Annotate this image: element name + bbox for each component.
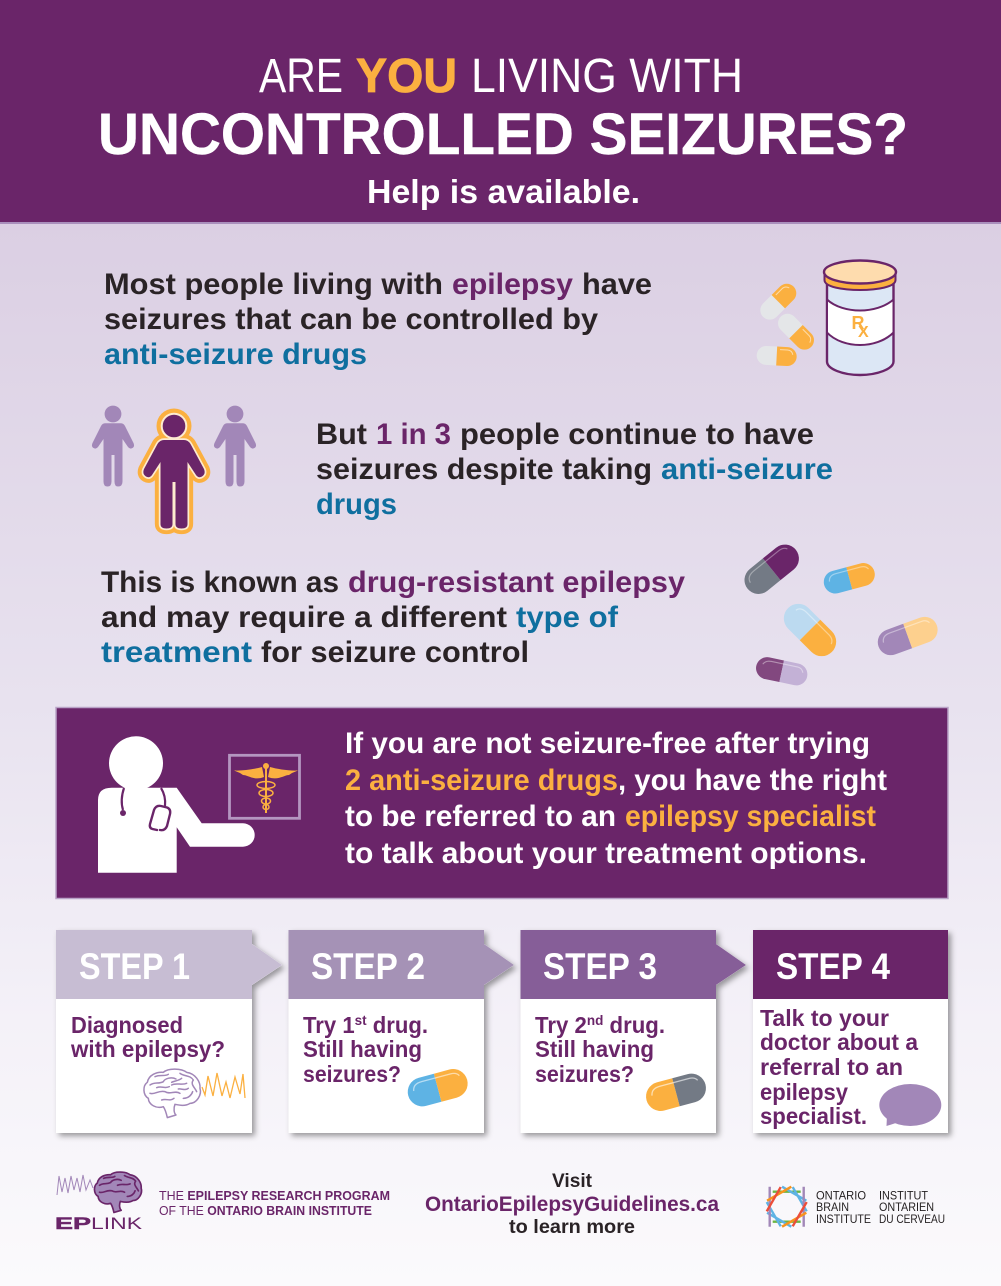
callout text: If you are not seizure-free after trying <box>345 727 870 760</box>
text block: 1 in 3: drugs <box>316 488 397 521</box>
step 1 text <box>70 1012 225 1062</box>
text block: drug-resistant epilepsy: and may require a different <box>101 601 507 634</box>
icon: blue and orange capsule <box>404 1066 471 1110</box>
subtitle: Help is available. <box>367 173 640 210</box>
text block: most people: epilepsy <box>452 268 573 301</box>
step 3 card <box>520 930 746 1133</box>
title line 1 <box>259 50 743 103</box>
logo: EpLink: EP <box>55 1214 91 1233</box>
logo: Ontario Brain Institute: ONTARIEN <box>879 1200 934 1214</box>
step 3 card: STEP 3 <box>543 946 657 987</box>
step 2 card: STEP 2 <box>311 946 425 987</box>
icon: speech bubble <box>879 1084 941 1126</box>
icon: pills and prescription bottle <box>756 260 896 375</box>
text block: most people: seizures that can be controlled by <box>104 303 598 336</box>
step 2 text: seizures? <box>303 1061 401 1087</box>
text: epilepsy research program tagline: THE EPILEPSY RESEARCH PROGRAM <box>159 1189 390 1203</box>
text block: most people: anti-seizure drugs <box>104 338 367 371</box>
text block: drug-resistant epilepsy: drug-resistant epilepsy <box>348 566 685 599</box>
logo: Ontario Brain Institute: DU CERVEAU <box>879 1212 945 1226</box>
panel: referral callout <box>56 708 948 898</box>
step 2 text: Still having <box>303 1036 422 1062</box>
step 3 text: drug. <box>603 1012 665 1038</box>
step 4 card <box>753 930 948 1133</box>
text block: most people <box>104 268 652 371</box>
step 4 text: specialist. <box>760 1103 867 1129</box>
text block: 1 in 3: But <box>316 418 367 451</box>
callout text: epilepsy specialist <box>625 800 876 833</box>
logo: EpLink: LINK <box>91 1214 143 1233</box>
icon: scattered capsules <box>739 539 941 687</box>
title line 2: UNCONTROLLED SEIZURES? <box>98 102 908 167</box>
text block: 1 in 3 <box>316 418 833 521</box>
step 4 text: Talk to your <box>760 1005 889 1031</box>
text block: most people: Most people living with <box>104 268 443 301</box>
text: epilepsy research program tagline: OF THE ONTARIO BRAIN INSTITUTE <box>159 1204 372 1218</box>
step 3 text: Try 2 <box>535 1012 589 1038</box>
step 1 text: with epilepsy? <box>70 1036 225 1062</box>
step 1 card: STEP 1 <box>79 946 190 987</box>
icon: pills and prescription bottle: R <box>852 313 864 333</box>
step 4 text: epilepsy <box>760 1079 848 1105</box>
text block: drug-resistant epilepsy: treatment <box>101 636 252 669</box>
logo: Ontario Brain Institute: INSTITUT <box>879 1188 929 1202</box>
text: visit website <box>425 1171 719 1238</box>
step 3 text: Still having <box>535 1036 654 1062</box>
text block: most people: have <box>582 268 652 301</box>
logo: Ontario Brain Institute: ONTARIO <box>816 1188 866 1202</box>
text block: drug-resistant epilepsy: for seizure control <box>261 636 529 669</box>
person centre highlighted <box>143 408 205 528</box>
step 2 text <box>303 1012 428 1087</box>
person right <box>214 406 256 486</box>
logo: Ontario Brain Institute: INSTITUTE <box>816 1212 871 1226</box>
callout text <box>345 727 887 870</box>
step 4 text <box>760 1005 918 1129</box>
text block: drug-resistant epilepsy: type of <box>516 601 619 634</box>
callout text: 2 anti-seizure drugs <box>345 764 618 797</box>
person left <box>92 406 134 486</box>
logo: EpLink <box>55 1172 143 1233</box>
step 4 header <box>753 930 948 999</box>
step 1 header <box>56 930 282 999</box>
icon: orange and grey capsule <box>643 1070 709 1114</box>
text: epilepsy research program tagline <box>159 1189 390 1218</box>
step 2 header <box>288 930 514 999</box>
step 3 text: seizures? <box>535 1061 634 1087</box>
header banner <box>0 0 1001 224</box>
step 2 card <box>288 930 514 1133</box>
text block: drug-resistant epilepsy <box>101 566 685 669</box>
step 3 text: nd <box>587 1012 603 1028</box>
text block: 1 in 3: 1 in 3 <box>376 418 451 451</box>
text: visit website: OntarioEpilepsyGuidelines.ca <box>425 1193 719 1216</box>
step 4 text: doctor about a <box>760 1029 918 1055</box>
title line 1: YOU <box>356 50 457 103</box>
icon: doctor with caduceus <box>98 736 300 873</box>
step 2 text: st <box>355 1012 367 1028</box>
icon: brain outline with seizure wave <box>144 1069 245 1118</box>
text block: 1 in 3: anti-seizure <box>661 453 833 486</box>
text block: 1 in 3: seizures despite taking <box>316 453 652 486</box>
title line 1: LIVING WITH <box>471 50 743 103</box>
step 4 card: STEP 4 <box>776 946 890 987</box>
text block: drug-resistant epilepsy: This is known as <box>101 566 339 599</box>
text: visit website: to learn more <box>509 1217 635 1238</box>
text: visit website: Visit <box>552 1171 593 1192</box>
callout text: to talk about your treatment options. <box>345 837 867 870</box>
step 3 header <box>520 930 746 999</box>
step 1 card <box>56 930 282 1133</box>
step 3 text <box>535 1012 665 1087</box>
logo: Ontario Brain Institute <box>767 1187 945 1227</box>
callout text: to be referred to an <box>345 800 616 833</box>
callout text: , you have the right <box>618 764 887 797</box>
step 1 text: Diagnosed <box>71 1012 183 1038</box>
icon: three people, one highlighted <box>92 406 256 528</box>
icon: pills and prescription bottle: X <box>858 324 869 341</box>
text block: 1 in 3: people continue to have <box>460 418 814 451</box>
title line 1: ARE <box>259 50 343 103</box>
step 2 text: drug. <box>367 1012 428 1038</box>
step 2 text: Try 1 <box>303 1012 357 1038</box>
logo: Ontario Brain Institute: BRAIN <box>816 1200 849 1214</box>
step 4 text: referral to an <box>760 1054 903 1080</box>
